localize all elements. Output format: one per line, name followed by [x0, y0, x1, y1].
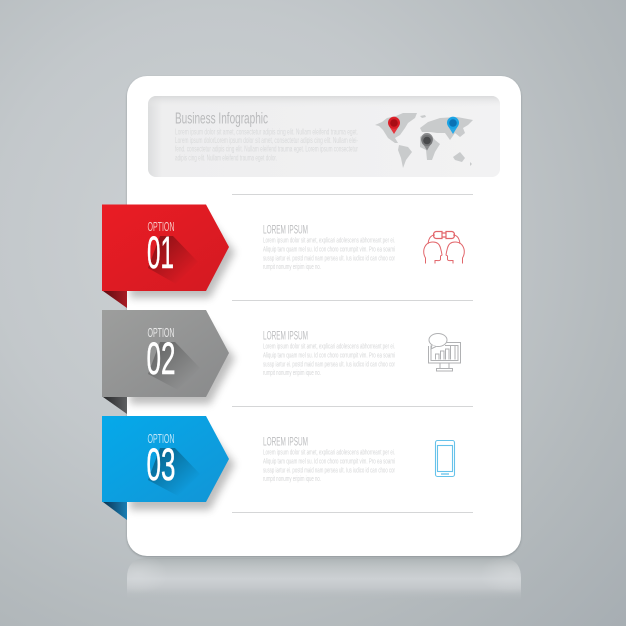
text block 1: rumpit nonumy eripim ique no. [263, 262, 321, 271]
text block 3 [263, 436, 395, 483]
text block 2: Aliquip tam quam mel su. Id con choro corrumpit vim. Pro ea soami [263, 350, 395, 360]
icon: two heads with plug [424, 232, 464, 264]
map pin: grey [421, 133, 433, 150]
ribbon fold [103, 397, 127, 414]
white card [127, 76, 521, 556]
option 3 ribbon [102, 416, 235, 520]
text block 3: Lorem ipsum dolor sit amet, explicari adolescens abhorreant per ei. [263, 448, 395, 456]
ribbon body [102, 310, 229, 397]
number: 02 [146, 333, 176, 384]
header body text: Lorem ipsum dolor sit amet, consectetur adipis cing elit. Nullam eleifend trauma eget. [175, 126, 358, 136]
text block 2 [263, 330, 395, 377]
icon: smartphone [436, 440, 454, 476]
header body text: Lorem ipsum dolorLorem ipsum dolor sit amet, consectetur adipis cing elit. Nullam elei- [175, 135, 358, 145]
text block 3: Aliquip tam quam mel su. Id con choro corrumpit vim. Pro ea soami [263, 456, 395, 466]
text block 1: LOREM IPSUM [263, 224, 308, 236]
number: 01 [147, 227, 174, 278]
text block 2: Lorem ipsum dolor sit amet, explicari adolescens abhorreant per ei. [263, 342, 395, 350]
text block 1: sussp iartur ei. postd maid nam persea ult. Ius iudico id can choo cor [263, 254, 395, 262]
number long shadow [148, 236, 198, 284]
ribbon fold [103, 502, 127, 520]
map pin: red [388, 117, 400, 134]
heading: Business Infographic: Business Infographic [175, 110, 268, 128]
text block 3: LOREM IPSUM [263, 436, 308, 448]
text block 1: Lorem ipsum dolor sit amet, explicari adolescens abhorreant per ei. [263, 236, 395, 244]
option 1 ribbon [102, 204, 235, 308]
ribbon fold [103, 291, 127, 308]
header body text: adipis cing elit. Nullam eleifend trauma eget dolor. [175, 152, 277, 162]
header body text: fend. consectetur adipis cing elit. Nullam eleifend trauma eget. Lorem ipsum consectetur [175, 144, 358, 154]
text block 1 [263, 224, 395, 271]
option label: OPTION [148, 326, 174, 340]
header body text [175, 126, 358, 162]
option label: OPTION [148, 432, 174, 446]
number long shadow [148, 342, 200, 390]
map pin: blue [447, 117, 459, 134]
text block 2: rumpit nonumy eripim ique no. [263, 368, 321, 377]
ribbon body [102, 204, 229, 291]
text block 3: rumpit nonumy eripim ique no. [263, 474, 321, 483]
panel: header [148, 96, 500, 177]
text block 1: Aliquip tam quam mel su. Id con choro corrumpit vim. Pro ea soami [263, 244, 395, 254]
text block 3: sussp iartur ei. postd maid nam persea ult. Ius iudico id can choo cor [263, 466, 395, 474]
ribbon body [102, 416, 229, 502]
number long shadow [148, 448, 200, 496]
option 2 ribbon [102, 310, 235, 414]
number: 03 [146, 439, 176, 490]
card shadow [127, 77, 521, 557]
reflection of card [127, 558, 521, 594]
world map [375, 113, 473, 168]
text block 2: sussp iartur ei. postd maid nam persea ult. Ius iudico id can choo cor [263, 360, 395, 368]
option label: OPTION [148, 220, 174, 234]
icon: monitor with chart and speech bubble [428, 334, 460, 371]
text block 2: LOREM IPSUM [263, 330, 308, 342]
